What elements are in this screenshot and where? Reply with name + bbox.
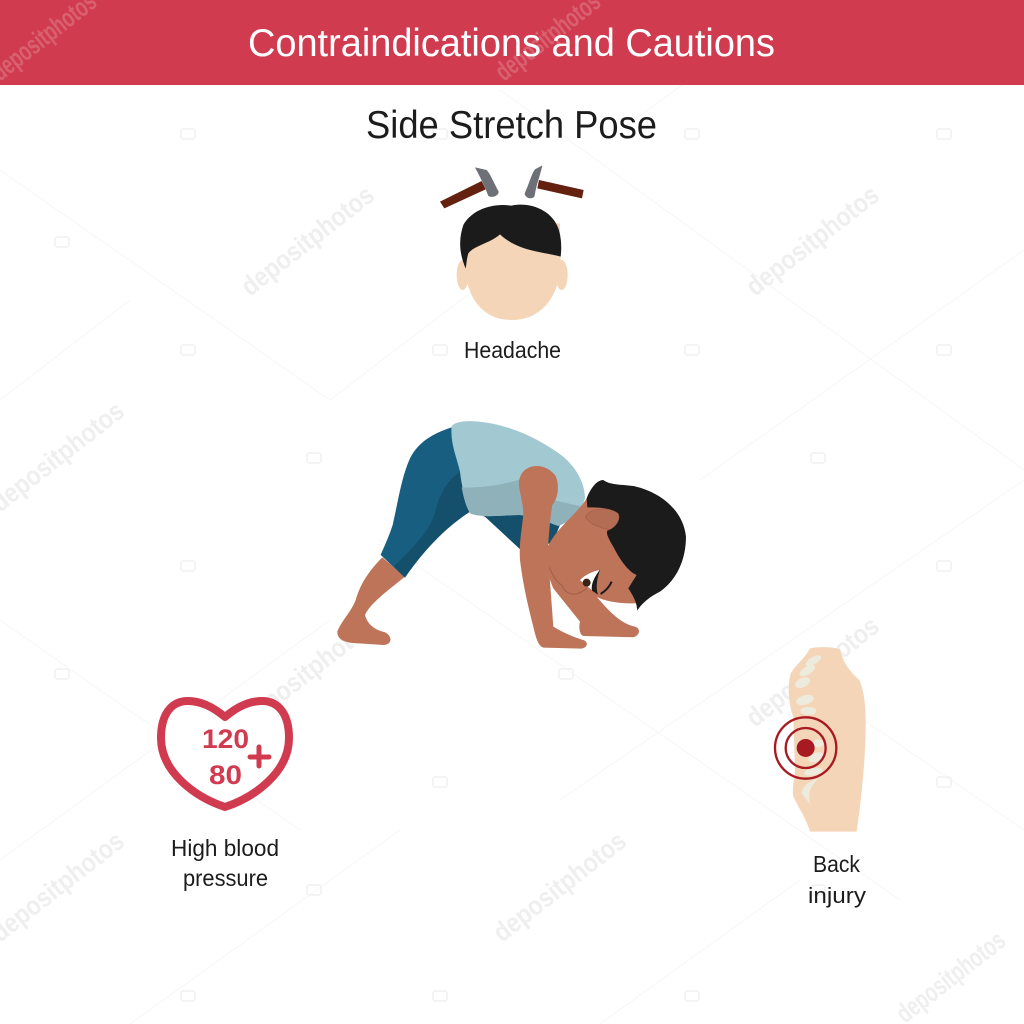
shirt <box>451 421 585 526</box>
label: high blood pressure: pressure <box>183 865 268 891</box>
label: high blood pressure: High blood <box>171 835 279 861</box>
title banner: Contraindications and Cautions <box>248 22 775 65</box>
label: back injury: Back <box>813 851 860 877</box>
figure: side stretch pose <box>337 421 686 649</box>
hammer left <box>440 167 499 208</box>
icon: headache <box>440 165 584 320</box>
eye <box>580 570 599 593</box>
shirt shadow <box>462 478 582 526</box>
icon: high blood pressure heart <box>161 701 289 807</box>
hair <box>587 480 686 611</box>
label: back injury: injury <box>808 883 866 908</box>
text: depositphotos <box>235 611 380 733</box>
hammer right <box>525 165 584 198</box>
jaw line <box>547 563 587 594</box>
icon: back injury <box>775 647 866 832</box>
text: depositphotos <box>235 180 380 302</box>
trousers shadow <box>394 472 560 578</box>
back leg skin <box>337 557 405 645</box>
text: depositphotos <box>740 180 885 302</box>
icon: high blood pressure heart: 120 <box>202 724 249 754</box>
subtitle: Side Stretch Pose <box>366 104 657 147</box>
text: depositphotos <box>740 611 885 733</box>
label: high blood pressure <box>171 835 279 891</box>
label: headache: Headache <box>464 337 561 363</box>
title banner <box>0 0 1024 87</box>
text: depositphotos <box>487 826 632 948</box>
ear <box>585 509 619 530</box>
target <box>775 717 836 779</box>
arm <box>519 466 587 649</box>
head and front foot skin <box>546 498 640 637</box>
trousers back <box>381 427 560 578</box>
label: back injury <box>808 851 866 908</box>
spine <box>793 653 825 805</box>
icon: high blood pressure heart: 80 <box>209 760 242 790</box>
